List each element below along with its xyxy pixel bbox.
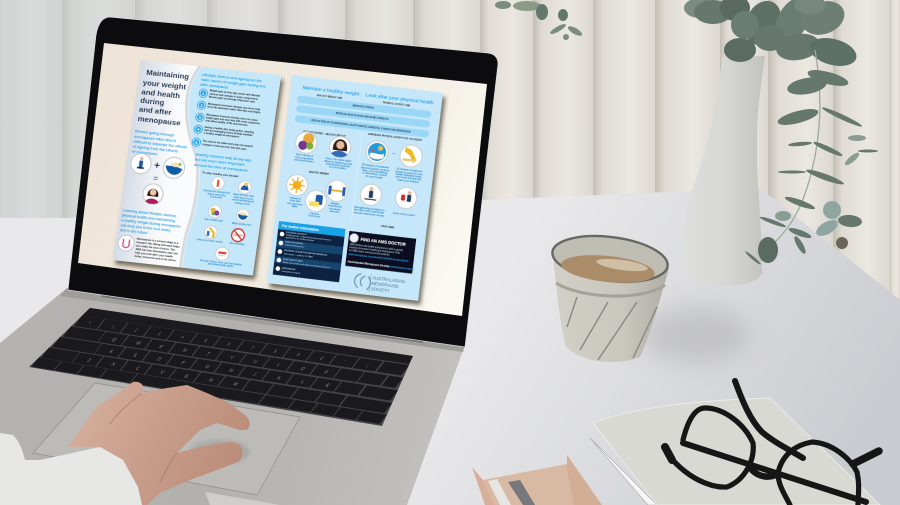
benefit bars: IMPROVES FITNESS <box>352 105 374 110</box>
caption: scales: and follow health advice <box>208 263 234 268</box>
main title <box>137 68 190 128</box>
closing blue text: and in the future. <box>120 228 148 235</box>
list text 3 <box>205 113 261 128</box>
list text 1: Weight gain as they age comes with lifestyle <box>210 89 261 98</box>
caption: bag <box>308 212 321 219</box>
intro blue text: difficult to separate the effects <box>133 139 187 149</box>
icon: two-way arrows: ⇔ <box>390 151 397 157</box>
main title: during <box>140 96 165 107</box>
caption: swimming: 30 minutes of moderate <box>362 163 390 170</box>
hand shape <box>68 382 250 505</box>
list text 2: Menopause hormone changes can move body <box>208 102 261 111</box>
icon: woman <box>142 183 164 205</box>
number badge 4: 4 <box>197 128 200 132</box>
caption: man exercising: two days every week keep <box>354 208 384 215</box>
list text 5: changes in how we look, feel and cope. <box>202 143 247 151</box>
panel: further information <box>273 221 346 282</box>
hand shadow <box>190 440 250 464</box>
list text 4: well and managing stress all help maintain <box>204 129 253 137</box>
caption: exercise: of the week <box>210 195 223 200</box>
AMS doctor body: AMS doctors are health practitioners with a special <box>350 243 403 252</box>
laptop base <box>0 288 465 505</box>
hanging branch <box>744 50 878 266</box>
healthy eating label: HEALTHY EATING – HEALTHY WEIGHT <box>303 130 346 138</box>
plus sign: + <box>153 161 161 172</box>
caption: yoga: health; flexibility keeps <box>395 173 423 179</box>
icon: plate <box>236 208 250 222</box>
info lines: WHAT ABOUT BMI? <box>283 258 304 263</box>
AMS logo text: SOCIETY <box>371 286 390 293</box>
main title: Maintaining <box>146 68 190 81</box>
info lines: MENOPAUSE <box>282 267 296 271</box>
closing black text: you make the best choices. The <box>136 243 176 252</box>
caption: swimming: for your health <box>365 175 383 180</box>
key row 3: ASDFGHJKLÑ <box>107 348 331 389</box>
AMS logo text: AUSTRALASIAN <box>372 275 405 284</box>
finger creases <box>110 393 177 482</box>
icon: yoga pose <box>399 144 423 168</box>
link labels: HEALTHY WEIGHT LINK <box>317 94 343 100</box>
caption: swimming: days, such as walking <box>362 169 388 175</box>
caption: exercise <box>203 189 231 201</box>
caption: sun: from safe <box>290 199 301 204</box>
caption: woman: and activity each day <box>326 163 351 168</box>
info lines: guidelines for all Australians <box>286 236 315 242</box>
caption: yoga <box>394 167 423 184</box>
AMS doctor icon <box>349 233 359 243</box>
peach stationery and pen <box>472 455 602 505</box>
curved blue panel <box>165 66 281 275</box>
info header <box>278 221 346 237</box>
caption: dumbbell: Weight- <box>331 202 340 206</box>
caption: healthy food: Eat a variety of <box>296 153 314 158</box>
AMS logo mark <box>353 272 372 292</box>
healthy choices heading: around the time of menopause <box>194 163 248 173</box>
caption: weights: Every move counts <box>393 212 416 217</box>
key row 5 <box>35 362 383 419</box>
infographic page 1 on screen <box>112 60 284 280</box>
caption: swimming: or swimming, is good <box>362 172 387 178</box>
main title: your weight <box>142 78 187 92</box>
closing black text: AMS has free information that can <box>135 247 178 255</box>
closing black text: Menopause is a normal stage in a <box>137 236 179 245</box>
caption: swimming: physical activity on most <box>361 166 390 172</box>
key row 1: º1234567890'¡ <box>86 321 370 369</box>
black glasses <box>665 381 879 505</box>
icon: man <box>130 152 152 175</box>
heading left: Maintain a healthy weight <box>302 85 360 98</box>
caption: plate: Watch portion size <box>232 222 252 227</box>
caption: sleep: manage stress <box>235 201 251 206</box>
healthy choices heading: Healthy choices help at any age, <box>195 152 253 163</box>
caption: woman: Keep your waist under <box>326 157 352 163</box>
causes heading: Lifestyle choices and ageing are the <box>202 73 262 83</box>
column divider <box>351 132 362 224</box>
benefit bars <box>294 95 432 138</box>
laptop screen bezel <box>68 17 498 347</box>
caption: sleep: mental wellbeing and <box>232 198 255 204</box>
list text 5: The choices we make every day can support <box>202 140 253 148</box>
caption: sleep <box>231 194 255 207</box>
link labels <box>317 94 411 108</box>
healthy habits icons <box>193 175 258 270</box>
cup shadow on desk <box>640 307 750 363</box>
caption: sun: Vitamin D <box>290 196 301 201</box>
keyboard <box>29 308 413 426</box>
caption: scales <box>199 259 243 269</box>
page shadow <box>270 79 446 305</box>
info lines: SMOKING CESSATION AND INFORMATION <box>284 249 328 257</box>
intro blue text: of ageing from the effects <box>133 144 178 153</box>
info lines: menopause.org.au <box>281 271 301 275</box>
caption: woman: 80cm by balancing food <box>324 160 353 166</box>
info lines: HEALTHY EATING <box>285 241 304 246</box>
ceramic coffee cup <box>550 230 670 362</box>
caption: sun <box>286 196 304 209</box>
icon: man exercising <box>359 183 383 207</box>
caption: yoga: 15 minutes of vigorous <box>396 167 423 174</box>
list text 4: a healthy weight at menopause. <box>203 132 240 139</box>
stay healthy label: To stay healthy you should: <box>202 170 239 178</box>
benefit bars: INCREASE MUSCLE MASS AND BONE STRENGTH <box>335 112 389 121</box>
icon: sleep <box>238 180 252 194</box>
icon: sun <box>285 173 309 197</box>
closing black text <box>134 236 181 263</box>
list text 3: Menopause hormone therapy does not cause <box>206 113 259 122</box>
small sprig top <box>495 1 583 40</box>
list text 4: Eating a healthy diet, being active, sleeping <box>204 126 255 134</box>
key row 3 <box>53 340 396 399</box>
keyboard bed <box>29 308 413 426</box>
caption: sun: daily <box>292 205 298 209</box>
closing blue text: a healthy weight during menopause <box>121 218 181 229</box>
caption: dumbbell <box>327 202 343 214</box>
main title: menopause <box>137 114 182 128</box>
healthy choices heading <box>194 152 253 173</box>
panel: find an AMS doctor <box>345 231 418 274</box>
desk surface <box>0 188 900 505</box>
AMS logo text: MENOPAUSE <box>371 281 399 289</box>
laptop screen display <box>78 43 487 316</box>
caption: woman: for your health <box>329 166 347 171</box>
caption: exercise: fitness every day <box>207 192 226 197</box>
closing black text: woman's life. Being informed helps <box>136 240 181 249</box>
intro blue text: Women going through <box>135 129 175 138</box>
list text 3: weight gain and may help with some symptoms <box>206 116 261 125</box>
icon: scales <box>215 247 230 261</box>
caption: dumbbell: resistance <box>329 207 341 212</box>
info lines: health.gov.au – physical activity and exercise <box>286 234 332 242</box>
info lines <box>281 231 334 278</box>
caption: bag: Calcium <box>310 212 319 216</box>
list text 1: Women gain on average 0.5kg each year. <box>209 95 256 104</box>
number badge 3: 3 <box>198 116 201 120</box>
closing blue text: can help you in the next today <box>120 223 171 233</box>
info lines: eatforhealth.gov.au <box>285 244 305 249</box>
caption: fruit: Eat a healthy diet <box>204 218 223 223</box>
main foliage above vase <box>684 0 860 71</box>
caption: man exercising: Strengthening activities on <box>354 206 385 212</box>
AMS doctor heading: FIND AN AMS DOCTOR <box>360 237 406 247</box>
healthy choices heading: but are even more important <box>195 158 246 167</box>
closing black text: help you look after your health <box>135 250 173 258</box>
closing blue text: physical health and maintaining <box>122 213 175 223</box>
numbered list <box>191 88 265 154</box>
AMS member line: Australasian Menopause Society menopause.org.au <box>348 259 415 271</box>
caption: no smoking: Stop smoking <box>229 242 245 247</box>
benefit bars: REDUCE RISK OF OSTEOPOROSIS, HEART DISEASE, DEMENTIA, CANCER AND DEPRESSION <box>311 119 411 134</box>
info heading: For further information <box>282 224 319 232</box>
activity label: HOW MUCH PHYSICAL ACTIVITY DO YOU NEED? <box>368 133 423 142</box>
caption: woman <box>324 157 353 171</box>
list text 3: that affect quality of life and exercise. <box>205 119 249 127</box>
page shadow <box>115 64 283 280</box>
main title: and after <box>138 105 172 117</box>
number badge 2: 2 <box>200 104 203 108</box>
list text 4 <box>203 126 255 140</box>
caption: yoga: your body moving and <box>395 176 422 182</box>
caption: man exercising: muscles and bones strong <box>353 211 384 218</box>
icon: woman with hair <box>328 135 352 159</box>
list text 2: fat to the abdomen rather than hips and thighs. <box>207 105 261 114</box>
caption: sun: sun exposure <box>287 202 303 207</box>
link labels: PHYSICAL ACTIVITY LINK <box>383 101 411 108</box>
closing black text: today, tomorrow and in the future. <box>134 254 177 262</box>
info bands <box>274 239 343 270</box>
caption: swimming <box>360 163 390 180</box>
curve shading <box>163 66 214 268</box>
caption: yoga: activity is good for your <box>395 170 423 176</box>
icon: dumbbell <box>325 179 349 203</box>
info bullets <box>275 232 285 271</box>
list text 1: choices and changes in body composition. <box>209 92 259 101</box>
hand on trackpad <box>68 382 250 505</box>
caption: healthy food <box>294 153 315 164</box>
caption: scales: Get your checks, tests, and vaccinations <box>200 259 243 267</box>
caption: dumbbell: exercise <box>329 210 340 214</box>
white knit sleeve <box>0 433 142 505</box>
equals sign: = <box>153 174 159 184</box>
intro blue text <box>132 129 189 159</box>
list text 1 <box>209 89 261 104</box>
eucalyptus plant <box>495 0 878 266</box>
hinge shadow <box>102 292 423 343</box>
caption: sleep: Sleep well and relax, <box>233 194 255 198</box>
key row 2 <box>64 330 400 387</box>
causes heading: main causes of weight gain during and <box>201 78 266 89</box>
intro blue text: of menopause. <box>132 149 158 156</box>
main title: and health <box>141 87 181 100</box>
heading right: Look after your physical health <box>365 92 434 105</box>
number badge 1: 1 <box>202 92 205 96</box>
icon: ribbon logo <box>117 234 135 252</box>
info lines: PHYSICAL ACTIVITY <box>286 231 308 237</box>
your town label: YOUR TOWN <box>380 226 395 230</box>
page background <box>267 75 443 301</box>
AMS doctor body <box>349 243 403 258</box>
closing blue text <box>120 208 182 239</box>
AMS doctor body: an AMS doctor near you at the website. <box>349 249 390 257</box>
page background <box>113 60 281 275</box>
infographic page 2 on screen <box>267 75 446 305</box>
icon: fruit <box>208 204 222 218</box>
trackpad <box>33 383 300 495</box>
icon: yoga <box>204 225 218 239</box>
key row 4 <box>42 351 389 412</box>
healthy drinks label: HEALTHY DRINKS <box>309 171 329 176</box>
AMS doctor body: interest in women's health and menopause. Find <box>349 246 401 255</box>
AMS doctor link: www.menopause.org.au/health-info/find-an-ams-doctor <box>348 253 409 263</box>
stack of notebooks <box>590 398 880 505</box>
caption: yoga: helps your balance <box>397 179 420 184</box>
intro blue text: menopause often find it <box>134 134 177 143</box>
caption: exercise: Exercise for strength and <box>203 189 231 195</box>
key row 4: ZXCVBNM <box>85 358 239 388</box>
AMS logo text <box>371 275 405 295</box>
icon: healthy food <box>294 131 318 154</box>
caption: healthy food: and whole grains <box>294 158 315 164</box>
caption: healthy food: fruit, vegetables <box>295 156 314 161</box>
icon: bag <box>304 189 328 213</box>
closing blue text: Learning about lifestyle choices, <box>122 208 177 218</box>
info lines: Body mass index calculator and waist measure <box>283 261 331 269</box>
icon: no smoking <box>231 228 245 242</box>
caption: bag: from food <box>308 215 320 219</box>
icon: food <box>162 156 186 179</box>
wall with vertical slats <box>0 0 900 310</box>
causes heading <box>200 73 266 94</box>
caption: dumbbell: bearing and <box>328 204 343 209</box>
caption: man exercising <box>353 206 385 218</box>
icon: weights <box>394 186 418 210</box>
key row 2: QWERTYUIOP <box>110 337 330 376</box>
icon: swimming <box>365 140 389 164</box>
icon: exercise <box>211 176 225 190</box>
caption: yoga: Keep your bones strong <box>197 238 223 244</box>
touch bar <box>82 308 413 364</box>
causes heading: after menopause <box>200 83 229 90</box>
info lines: quit.org.au – quitline 13 7848 <box>284 252 314 259</box>
number badge 5: 5 <box>195 141 198 145</box>
vase <box>683 56 765 286</box>
caption: sleep: make time for your <box>233 196 253 201</box>
